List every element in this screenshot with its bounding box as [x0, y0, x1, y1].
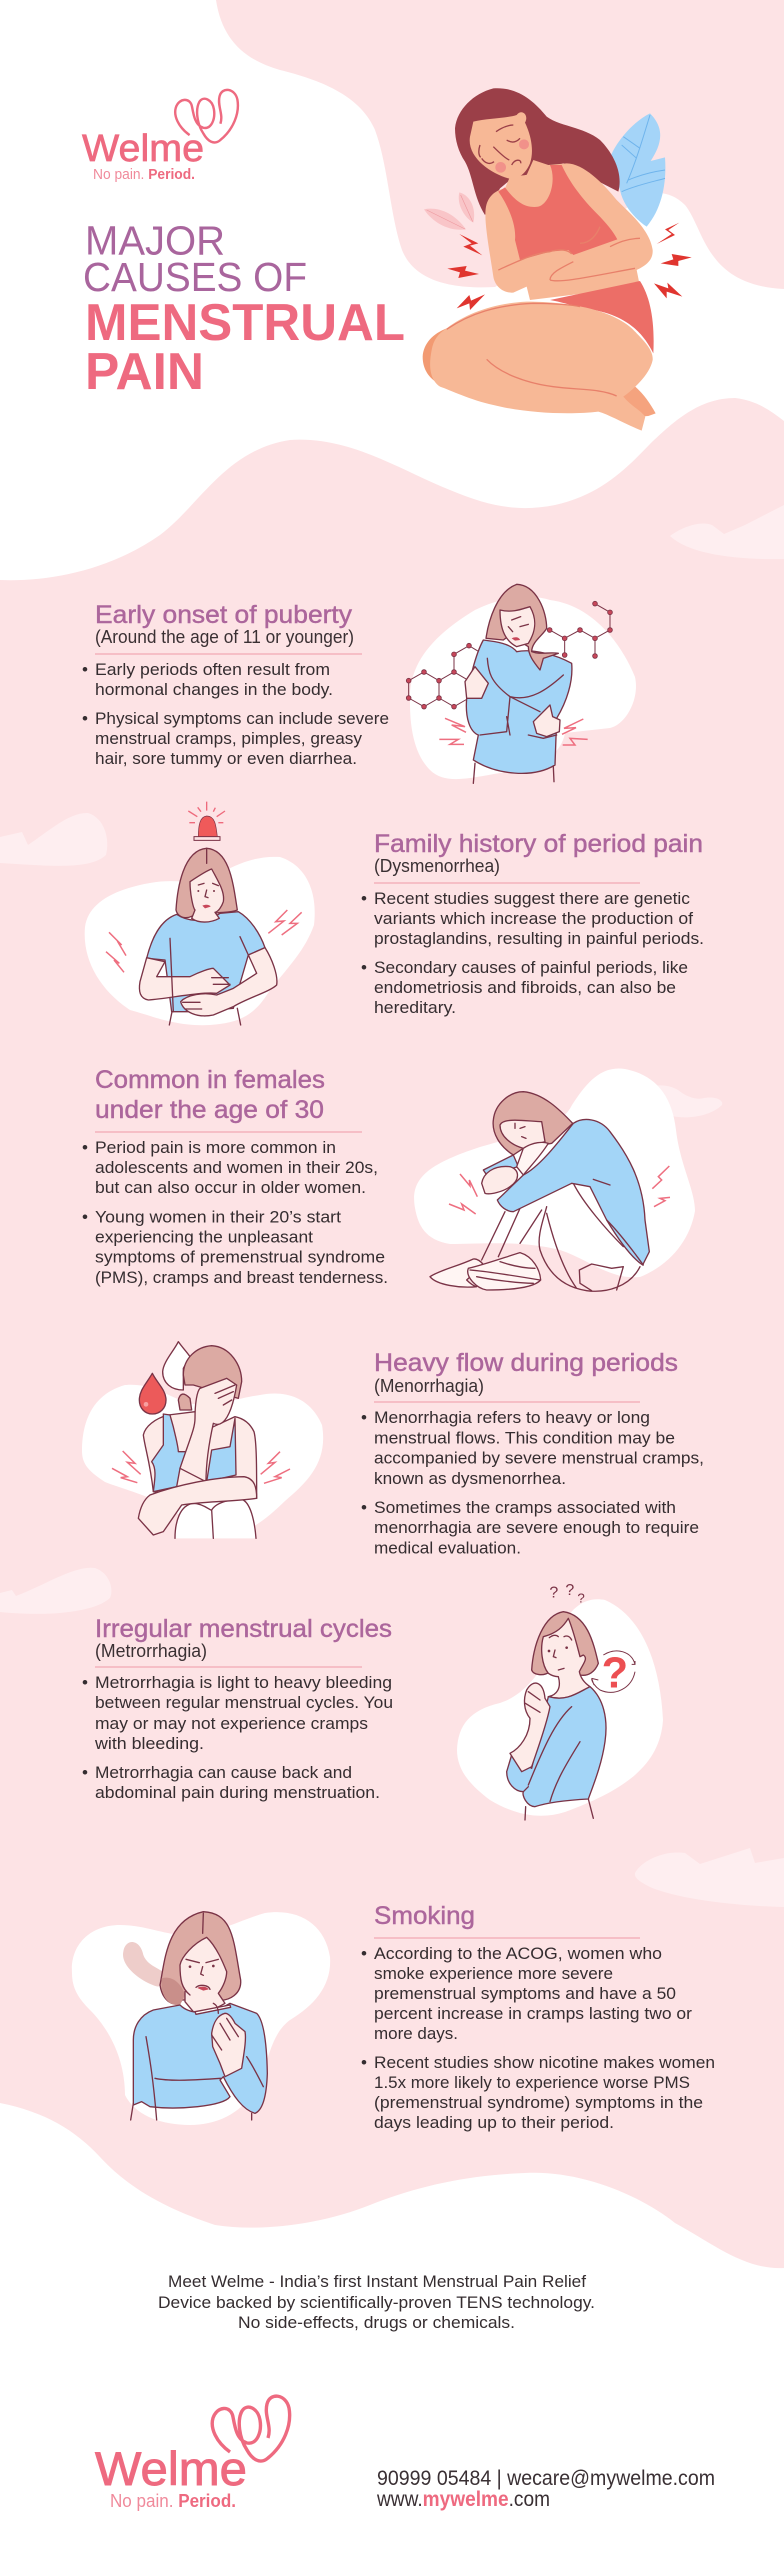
logo: top: Welme — [82, 128, 204, 170]
body text: Menorrhagia refers to heavy or long — [374, 1408, 650, 1427]
body text: Secondary causes of painful periods, like — [374, 958, 688, 977]
illustration: woman with siren — [85, 802, 315, 1025]
logo: top — [82, 90, 238, 183]
body text: (PMS), cramps and breast tenderness. — [95, 1268, 388, 1287]
body text: between regular menstrual cycles. You — [95, 1693, 393, 1712]
title: PAIN — [85, 343, 204, 401]
heading: Smoking — [374, 1902, 475, 1930]
contact details — [376, 2467, 715, 2511]
illustration: questioning woman — [457, 1582, 663, 1820]
body text: premenstrual symptoms and have a 50 — [374, 1984, 676, 2003]
body text: • — [361, 1498, 367, 1517]
body text: • — [361, 1944, 367, 1963]
panel: common under 30 — [82, 1066, 695, 1291]
heading: Heavy flow during periods — [374, 1349, 678, 1377]
closing statement: Device backed by scientifically-proven TENS technology. — [158, 2293, 595, 2312]
illustration: questioning woman: ? — [577, 1590, 585, 1605]
illustration: woman with blood drop — [82, 1342, 323, 1538]
body text: symptoms of premenstrual syndrome — [95, 1248, 385, 1266]
body text: • — [361, 2053, 367, 2072]
heading: Irregular menstrual cycles — [95, 1615, 392, 1643]
body text — [361, 1408, 704, 1558]
illustration: questioning woman: ? — [549, 1585, 558, 1602]
body text — [82, 660, 389, 768]
body text: • — [82, 709, 88, 728]
illustration: woman smoking — [72, 1912, 330, 2125]
body text: medical evaluation. — [374, 1538, 521, 1558]
body text: but can also occur in older women. — [95, 1178, 366, 1197]
body text: endometriosis and fibroids, can also be — [374, 978, 676, 997]
body text: hereditary. — [374, 998, 456, 1017]
body text — [82, 1138, 388, 1287]
illustration: questioning woman: ? — [602, 1649, 628, 1697]
body text — [82, 1673, 393, 1802]
body text: • — [82, 1673, 88, 1692]
body text: hormonal changes in the body. — [95, 680, 333, 699]
body text: Period pain is more common in — [95, 1138, 336, 1157]
body text: prostaglandins, resulting in painful periods. — [374, 929, 704, 948]
body text: • — [82, 660, 88, 679]
contact details: www.mywelme.com — [376, 2488, 550, 2511]
closing statement — [158, 2272, 595, 2332]
body text: hair, sore tummy or even diarrhea. — [95, 749, 357, 768]
body text: variants which increase the production of — [374, 909, 693, 928]
body text: • — [82, 1763, 88, 1782]
title: MAJOR — [85, 218, 225, 264]
body text: Physical symptoms can include severe — [95, 709, 389, 728]
title: CAUSES OF — [83, 254, 307, 300]
heading: Common in females — [95, 1066, 325, 1094]
body text: Recent studies suggest there are genetic — [374, 889, 691, 908]
body text: (premenstrual syndrome) symptoms in the — [374, 2093, 703, 2112]
illustration: woman hugging knees — [414, 1068, 695, 1291]
subheading: (Around the age of 11 or younger) — [95, 627, 354, 647]
main pink background — [0, 398, 784, 2268]
panel: irregular cycles — [82, 1582, 663, 1820]
body text: may or may not experience cramps — [95, 1714, 368, 1733]
body text: According to the ACOG, women who — [374, 1944, 662, 1963]
body text: Metrorrhagia is light to heavy bleeding — [95, 1673, 392, 1692]
logo: bottom: Welme — [95, 2442, 247, 2495]
body text: menstrual flows. This condition may be — [374, 1428, 675, 1448]
body text: known as dysmenorrhea. — [374, 1469, 566, 1488]
logo: top: No pain. Period. — [93, 166, 195, 183]
body text: menorrhagia are severe enough to require — [374, 1518, 699, 1537]
illustration: woman holding stomach — [423, 88, 692, 431]
body text: 1.5x more likely to experience worse PMS — [374, 2073, 690, 2092]
body text: • — [82, 1208, 88, 1226]
title: MENSTRUAL — [85, 294, 405, 352]
body text: with bleeding. — [94, 1734, 204, 1753]
body text: Metrorrhagia can cause back and — [95, 1763, 352, 1782]
subheading: (Menorrhagia) — [374, 1376, 484, 1396]
decorative clouds — [0, 505, 784, 1907]
body text: Early periods often result from — [95, 660, 330, 679]
body text — [361, 889, 704, 1017]
title — [83, 218, 405, 401]
body text: • — [361, 889, 367, 908]
body text: more days. — [374, 2024, 458, 2043]
body text: smoke experience more severe — [374, 1964, 613, 1983]
body text: accompanied by severe menstrual cramps, — [374, 1448, 704, 1468]
body text: abdominal pain during menstruation. — [95, 1783, 380, 1802]
logo: bottom: No pain. Period. — [110, 2490, 236, 2511]
contact details: 90999 05484 | wecare@mywelme.com — [377, 2467, 715, 2490]
body text: • — [361, 1408, 367, 1427]
body text: days leading up to their period. — [374, 2113, 614, 2132]
panel: heavy flow — [82, 1342, 704, 1558]
closing statement: Meet Welme - India’s first Instant Menstrual Pain Relief — [168, 2272, 586, 2291]
body text: • — [82, 1138, 88, 1157]
panel: family history — [85, 802, 704, 1025]
body text: • — [361, 958, 367, 977]
top pink wave background — [216, 0, 784, 289]
heading — [95, 1066, 325, 1124]
body text: adolescents and women in their 20s, — [95, 1158, 378, 1177]
closing statement: No side-effects, drugs or chemicals. — [238, 2313, 515, 2332]
body text: experiencing the unpleasant — [95, 1228, 313, 1246]
body text: Sometimes the cramps associated with — [374, 1498, 676, 1517]
body text — [361, 1944, 715, 2132]
subheading: (Metrorrhagia) — [95, 1641, 207, 1661]
heading: Family history of period pain — [374, 830, 703, 858]
illustration: questioning woman: ? — [565, 1582, 574, 1599]
body text: menstrual cramps, pimples, greasy — [95, 729, 363, 748]
panel: smoking — [72, 1902, 715, 2132]
body text: Young women in their 20’s start — [95, 1208, 341, 1226]
illustration: woman with molecules — [406, 584, 636, 783]
heading: under the age of 30 — [95, 1096, 324, 1124]
logo: bottom — [95, 2396, 290, 2511]
panel: early onset of puberty — [82, 584, 636, 783]
heading: Early onset of puberty — [95, 601, 353, 629]
subheading: (Dysmenorrhea) — [374, 856, 500, 876]
body text: Recent studies show nicotine makes women — [374, 2053, 715, 2072]
body text: percent increase in cramps lasting two or — [374, 2004, 692, 2023]
